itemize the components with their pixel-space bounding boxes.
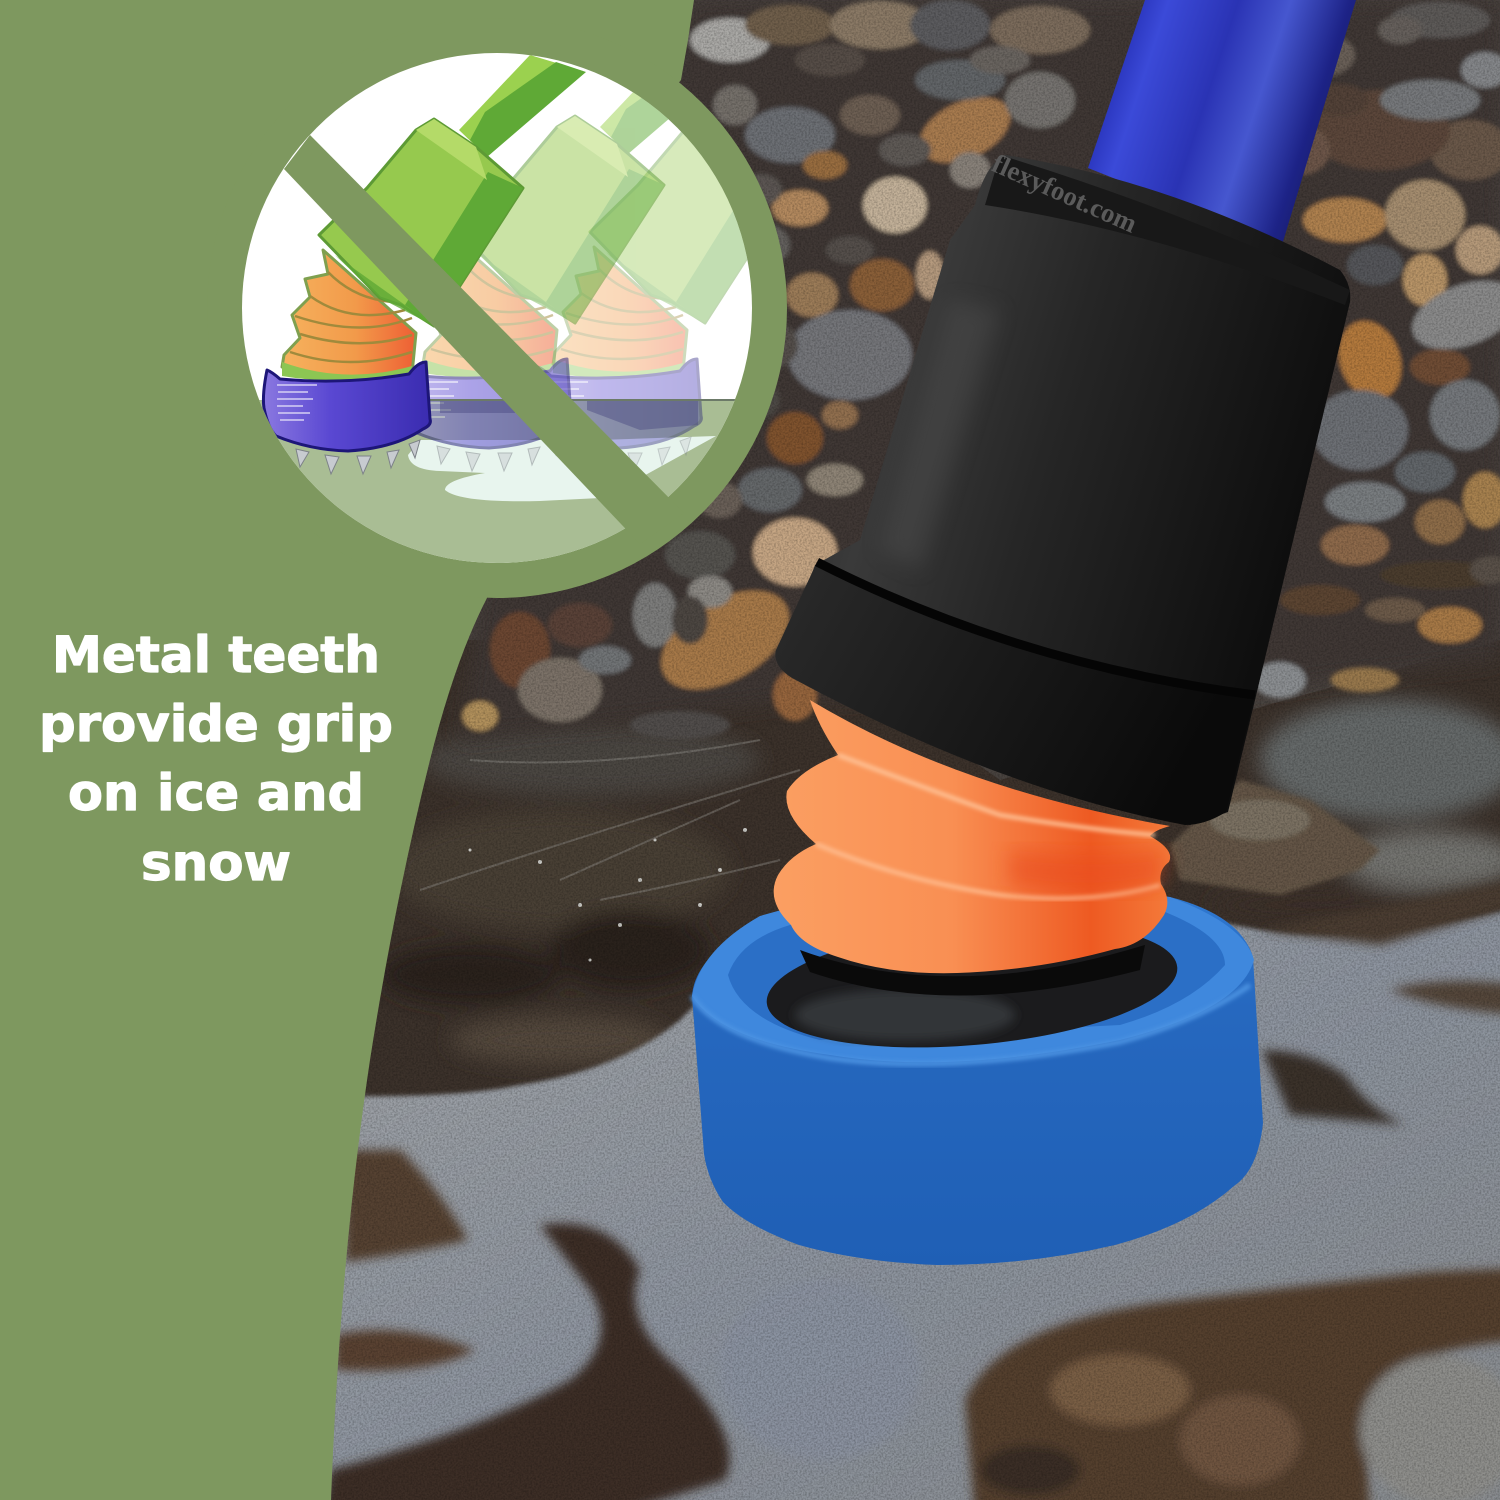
ferrule lower flange bbox=[775, 562, 1255, 825]
icon: illustrated scene bbox=[260, 55, 748, 563]
photo: brown meltwater patches bbox=[320, 880, 1500, 1500]
blue base ring bbox=[692, 882, 1263, 1265]
orange flexible bellows bbox=[774, 700, 1170, 973]
icon: white disc bbox=[242, 53, 752, 563]
black rubber ferrule bbox=[775, 148, 1350, 825]
icon: faded second ferrule bbox=[417, 92, 668, 472]
icon: faded third ferrule bbox=[538, 132, 748, 466]
photo: wet mud and dark ground band bbox=[300, 640, 1500, 1200]
photo: gravel bed bbox=[460, 0, 1500, 740]
icon: ice puddle bbox=[408, 436, 716, 501]
icon: prohibition bar bbox=[284, 135, 684, 544]
icon: ground line and shaded bases bbox=[440, 400, 698, 430]
caption text bbox=[39, 626, 393, 892]
blue crutch shaft bbox=[1088, 0, 1356, 245]
green panel bbox=[0, 0, 787, 1500]
photo: ice sheet bbox=[300, 880, 1500, 1500]
caption text: Metal teeth bbox=[52, 626, 380, 684]
icon: main ferrule bbox=[263, 55, 586, 474]
caption text: provide grip bbox=[39, 695, 393, 753]
icon: ground bbox=[260, 400, 734, 563]
photo: mud streaks and specks bbox=[420, 740, 800, 900]
photo: rock beside the foot bbox=[1170, 780, 1380, 895]
caption text: snow bbox=[141, 834, 291, 892]
black inner core bbox=[762, 907, 1182, 1063]
caption text: on ice and bbox=[68, 764, 364, 822]
icon: prohibited spiked ferrule bbox=[242, 53, 752, 563]
moulded brand text: flexyfoot.com bbox=[988, 148, 1142, 239]
crutch foot product bbox=[692, 0, 1356, 1265]
